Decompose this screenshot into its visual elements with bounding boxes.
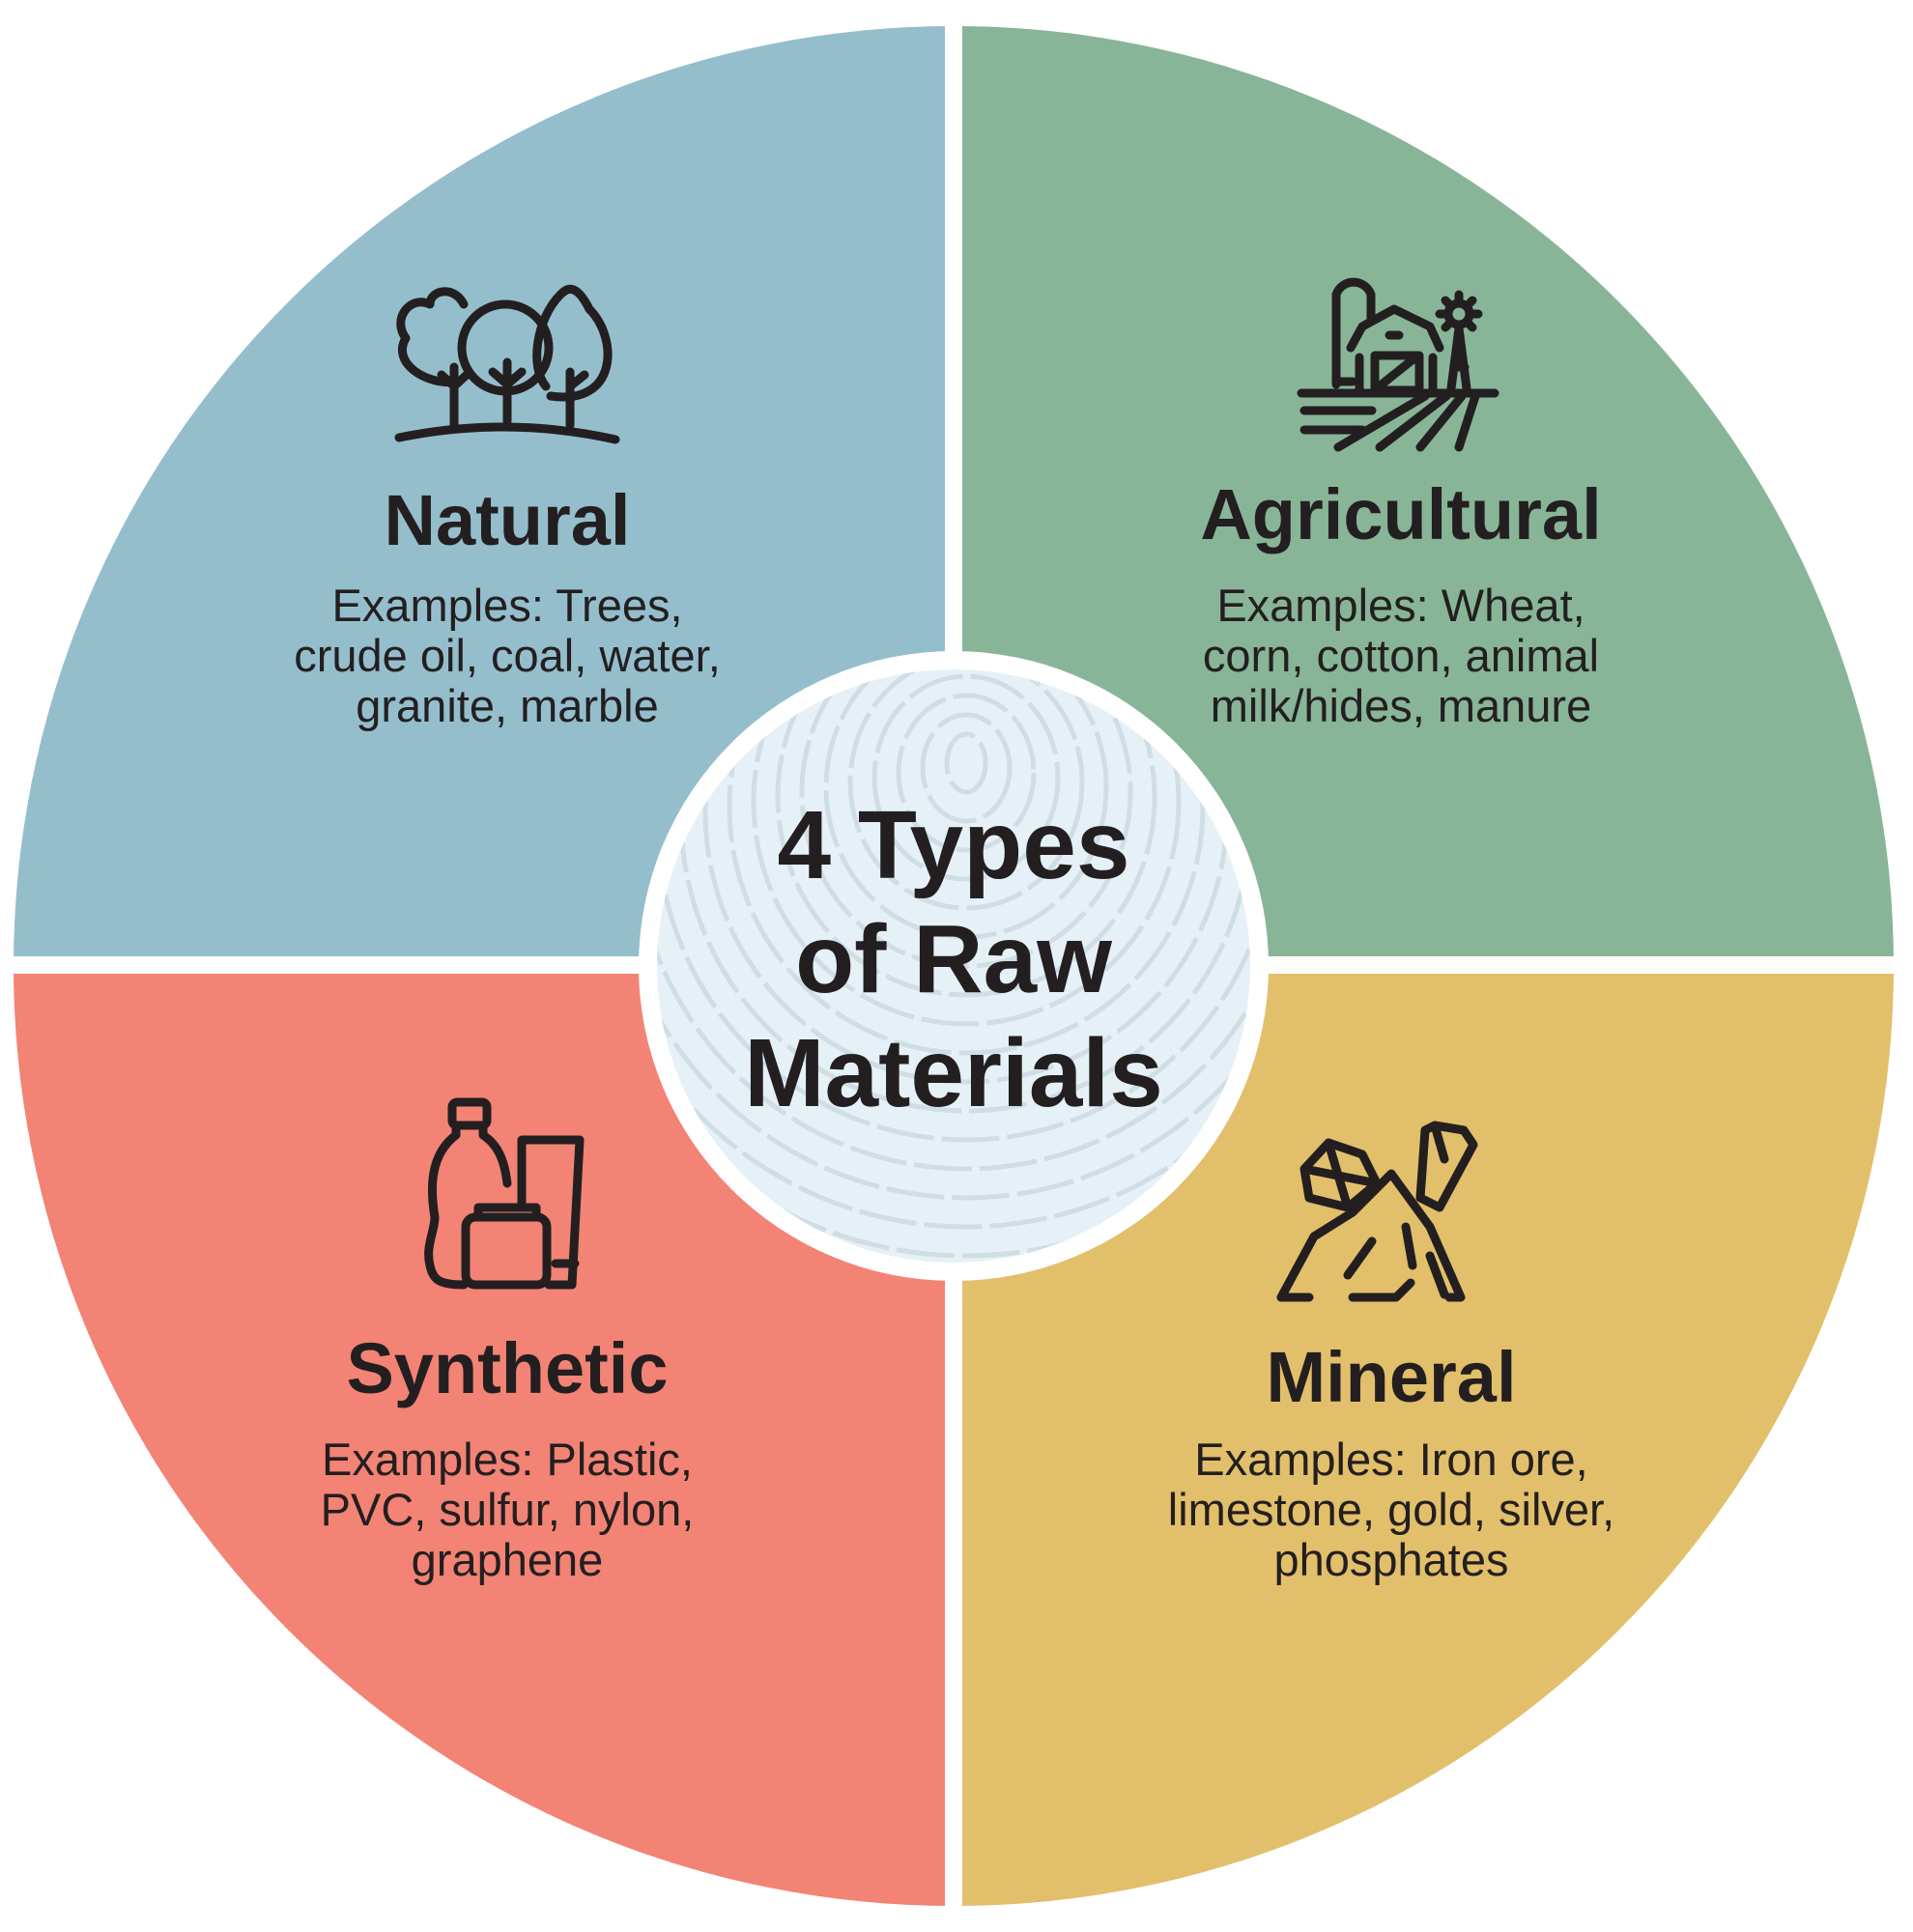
examples: mineral	[1168, 1434, 1614, 1585]
examples: mineral: phosphates	[1273, 1534, 1509, 1585]
examples: natural: crude oil, coal, water,	[294, 630, 721, 681]
title	[744, 791, 1163, 1127]
title: of Raw	[795, 905, 1112, 1013]
title: Materials	[744, 1019, 1163, 1127]
center badge	[639, 651, 1269, 1281]
heading: natural: Natural	[385, 480, 630, 560]
examples: synthetic: Examples: Plastic,	[322, 1434, 693, 1485]
title: 4 Types	[777, 791, 1130, 899]
examples: agricultural: corn, cotton, animal	[1203, 630, 1599, 681]
examples: synthetic: PVC, sulfur, nylon,	[321, 1484, 694, 1535]
examples: natural: Examples: Trees,	[331, 580, 683, 631]
icon: bottles	[429, 1102, 580, 1285]
heading: synthetic	[321, 1328, 694, 1585]
examples: natural	[294, 580, 721, 731]
examples: agricultural	[1203, 580, 1599, 731]
panel: agricultural	[962, 0, 1913, 956]
examples: mineral: Examples: Iron ore,	[1194, 1434, 1588, 1485]
examples: agricultural: Examples: Wheat,	[1216, 580, 1585, 631]
heading: agricultural: Agricultural	[1200, 474, 1602, 554]
heading: synthetic: Synthetic	[346, 1328, 669, 1408]
examples: synthetic: graphene	[412, 1534, 603, 1585]
icon: minerals	[1281, 1125, 1473, 1297]
panel: synthetic	[0, 974, 945, 1932]
examples: synthetic	[321, 1434, 694, 1585]
heading: mineral: Mineral	[1266, 1337, 1517, 1417]
heading: mineral	[1168, 1337, 1614, 1585]
panel: mineral	[962, 974, 1913, 1932]
icon: trees	[399, 289, 615, 440]
icon: farm	[1301, 282, 1495, 447]
examples: natural: granite, marble	[356, 680, 659, 731]
heading: natural	[294, 480, 721, 731]
examples: agricultural: milk/hides, manure	[1211, 680, 1591, 731]
heading: agricultural	[1200, 474, 1602, 731]
examples: mineral: limestone, gold, silver,	[1168, 1484, 1614, 1535]
